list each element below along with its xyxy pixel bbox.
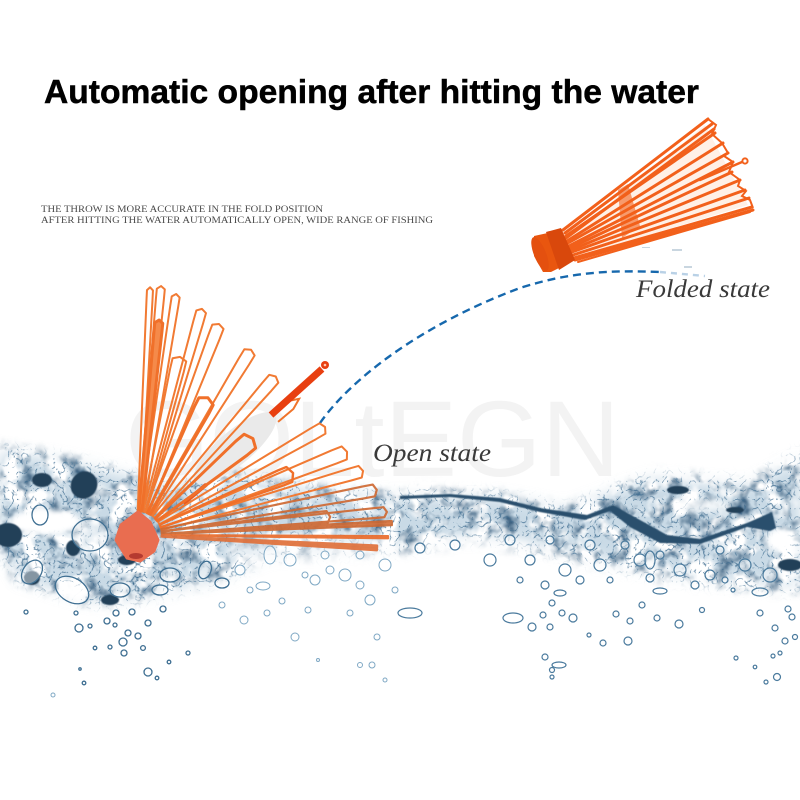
bubbles left [17,505,229,685]
description text: THE THROW IS MORE ACCURATE IN THE FOLD POSITION [41,204,323,215]
label: folded state: Folded state [635,276,770,303]
folded hub [534,230,575,272]
infographic canvas [0,78,800,698]
white float body [182,402,286,505]
folded cage tips [708,119,753,208]
open spokes low over water [160,484,392,550]
bright pockets in water [9,477,794,599]
dashed throw trajectory [320,271,705,423]
icon: folded float [528,119,753,273]
water body tones [0,452,800,600]
red float rod [271,361,329,415]
hub dark notch [129,553,143,559]
watermark: GOLtEGN [125,378,620,499]
water splash [0,400,800,700]
open spokes upper [136,286,365,534]
title: Automatic opening after hitting the water [44,73,699,110]
dark water surface streak [400,494,776,544]
dark water patches [0,466,800,605]
open spokes bold [136,320,296,534]
folded hub collar [546,228,575,270]
description text [41,204,433,226]
water texture [0,439,800,612]
description text: AFTER HITTING THE WATER AUTOMATICALLY OPEN, WIDE RANGE OF FISHING [41,215,433,226]
faint marks near folded product [642,247,692,268]
label: open state: Open state [373,440,491,467]
folded cage ribs [563,119,753,262]
bubbles right and light [51,546,398,697]
open float hub [116,512,158,561]
icon: open float in water [116,286,392,561]
folded body shading [618,184,640,238]
folded cage white core [570,125,748,256]
rear short spoke [272,394,302,422]
